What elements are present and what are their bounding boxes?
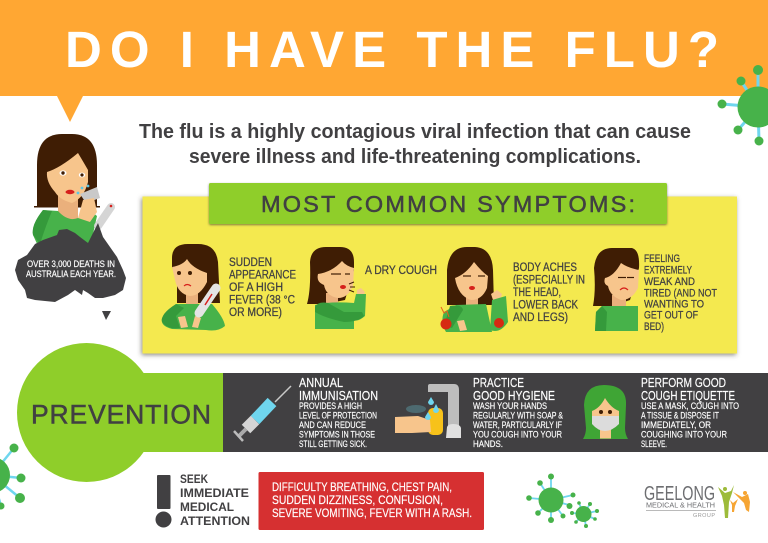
callout: emergency symptoms: SEVERE VOMITING, FEVER WITH A RASH. xyxy=(272,506,472,520)
text: cough etiquette: SLEEVE. xyxy=(641,439,667,449)
symptom illustration: fever with thermometer xyxy=(162,244,225,330)
symptom text: weak and tired: WEAK AND xyxy=(644,276,695,288)
title: DO I HAVE THE FLU? xyxy=(65,21,719,78)
text: annual immunisation: LEVEL OF PROTECTION xyxy=(299,410,377,420)
symptom illustration: body aches xyxy=(440,247,508,332)
symptom text: fever: OF A HIGH xyxy=(229,282,283,294)
text: annual immunisation: PROVIDES A HIGH xyxy=(299,401,362,411)
text: good hygiene: REGULARLY WITH SOAP & xyxy=(473,410,563,420)
text: good hygiene: GOOD HYGIENE xyxy=(473,389,555,403)
symptom text: body aches: BODY ACHES xyxy=(513,262,577,274)
symptom text: fever: FEVER (38 °C xyxy=(229,294,295,306)
symptom text: fever: OR MORE) xyxy=(229,307,282,319)
text: cough etiquette xyxy=(641,376,739,449)
symptom text: fever xyxy=(229,257,296,319)
icon: virus bottom left xyxy=(0,444,26,510)
text: cough etiquette: IMMEDIATELY, OR xyxy=(641,420,711,430)
text: annual immunisation: IMMUNISATION xyxy=(299,389,378,403)
logo: Geelong Medical & Health Group: GROUP xyxy=(693,513,715,519)
intro text: severe illness and life-threatening complications. xyxy=(189,146,641,168)
panel: prevention xyxy=(17,343,768,482)
map: Australia with deaths statistic: OVER 3,000 DEATHS IN xyxy=(27,259,115,269)
heading: seek immediate medical attention: IMMEDIATE xyxy=(180,488,249,500)
symptom text: body aches: LOWER BACK xyxy=(513,300,578,312)
heading: seek immediate medical attention: SEEK xyxy=(180,474,209,486)
intro text: The flu is a highly contagious viral infection that can cause xyxy=(139,121,691,143)
symptom text: weak and tired: TIRED (AND NOT xyxy=(644,288,717,300)
icon: virus top right xyxy=(718,65,768,146)
text: cough etiquette: COUGH ETIQUETTE xyxy=(641,389,735,403)
symptom text: body aches xyxy=(513,262,585,324)
icon: hand washing at tap xyxy=(395,384,461,438)
symptom text: weak and tired: FEELING xyxy=(644,253,680,265)
symptom text: body aches: THE HEAD, xyxy=(513,287,561,299)
heading: most common symptoms xyxy=(209,183,667,224)
green prevention badge xyxy=(17,343,223,482)
text: cough etiquette: USE A MASK, COUGH INTO xyxy=(641,401,739,411)
text: good hygiene xyxy=(473,376,563,449)
text: annual immunisation: ANNUAL xyxy=(299,376,343,390)
callout: emergency symptoms xyxy=(258,472,484,530)
text: good hygiene: PRACTICE xyxy=(473,376,524,390)
panel: most common symptoms xyxy=(142,183,737,354)
intro text xyxy=(139,121,691,168)
text: good hygiene: HANDS. xyxy=(473,439,503,449)
icon: virus cluster bottom xyxy=(526,474,599,528)
text: annual immunisation: SYMPTOMS IN THOSE xyxy=(299,430,375,440)
symptom text: weak and tired: BED) xyxy=(644,321,664,333)
logo: Geelong Medical & Health Group: GEELONG xyxy=(644,483,715,505)
heading: seek immediate medical attention: ATTENTION xyxy=(180,516,250,528)
map: Australia with deaths statistic: AUSTRALIA EACH YEAR. xyxy=(26,269,116,279)
text: annual immunisation: AND CAN REDUCE xyxy=(299,420,366,430)
heading: seek immediate medical attention xyxy=(180,474,250,528)
header banner xyxy=(0,0,768,122)
text: cough etiquette: COUGHING INTO YOUR xyxy=(641,430,727,440)
text: cough etiquette: PERFORM GOOD xyxy=(641,376,726,390)
symptom text: weak and tired: GET OUT OF xyxy=(644,310,698,322)
green prevention badge: PREVENTION xyxy=(31,400,211,430)
callout: emergency symptoms: SUDDEN DIZZINESS, CONFUSION, xyxy=(272,493,443,507)
symptom text: weak and tired: EXTREMELY xyxy=(644,264,692,276)
symptom illustration: weak and tired xyxy=(593,248,639,331)
logo: Geelong Medical & Health Group: MEDICAL & HEALTH xyxy=(646,500,715,510)
text: good hygiene: WATER, PARTICULARLY IF xyxy=(473,420,562,430)
icon: exclamation mark xyxy=(156,475,172,528)
illustration: woman blowing nose xyxy=(33,134,112,246)
symptom text: body aches: (ESPECIALLY IN xyxy=(513,274,585,286)
symptom text: body aches: AND LEGS) xyxy=(513,312,568,324)
map: Australia with deaths statistic xyxy=(15,223,126,320)
text: annual immunisation xyxy=(299,376,378,449)
callout: emergency symptoms: DIFFICULTY BREATHING, CHEST PAIN, xyxy=(272,480,452,494)
symptom text: fever: SUDDEN xyxy=(229,257,272,269)
text: annual immunisation: STILL GETTING SICK. xyxy=(299,439,367,449)
text: cough etiquette: A TISSUE & DISPOSE IT xyxy=(641,410,719,420)
symptom illustration: coughing xyxy=(307,247,366,329)
symptom text: weak and tired xyxy=(644,253,717,333)
text: good hygiene: YOU COUGH INTO YOUR xyxy=(473,430,562,440)
dark prevention band xyxy=(223,373,768,452)
symptom text: fever: APPEARANCE xyxy=(229,270,296,282)
heading: seek immediate medical attention: MEDICAL xyxy=(180,502,234,514)
heading: most common symptoms: MOST COMMON SYMPTOMS: xyxy=(261,191,635,217)
symptom text: weak and tired: WANTING TO xyxy=(644,298,704,310)
symptom text: dry cough: A DRY COUGH xyxy=(365,265,437,277)
icon: woman with mask xyxy=(583,385,628,439)
logo: Geelong Medical & Health Group xyxy=(644,483,750,519)
text: good hygiene: WASH YOUR HANDS xyxy=(473,401,547,411)
icon: syringe xyxy=(234,386,291,441)
